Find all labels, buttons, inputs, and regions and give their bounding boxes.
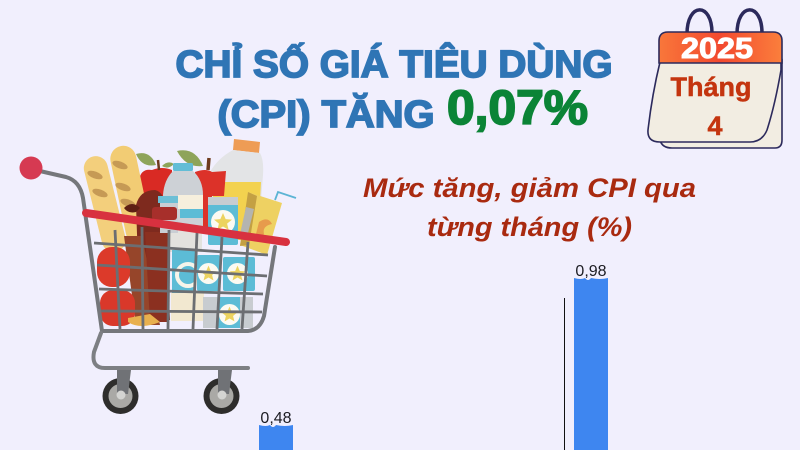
subtitle: Mức tăng, giảm CPI qua [363,173,696,203]
apples [136,150,226,232]
juice jug [210,139,263,240]
cart wire grid [94,227,268,329]
axis line [564,298,566,450]
title: CHỈ SỐ GIÁ TIÊU DÙNG [176,41,612,86]
cart red rail [86,213,286,242]
cans and boxes [197,197,255,328]
icon: calendar: 4 [707,111,723,141]
meats [124,190,178,325]
milk bottle [163,163,204,321]
bar chart [259,263,608,450]
bar: 0,98: 0,98 [575,263,607,280]
subtitle [363,173,696,242]
bar: 0,98 [574,263,608,450]
icon: calendar [648,10,782,148]
bar: 0,48 [259,410,293,450]
back wheel [204,370,240,414]
front wheel [102,370,138,414]
icon: calendar: Tháng [670,72,752,102]
title: (CPI) TĂNG [218,92,434,136]
baguettes [81,143,154,254]
cart frame [31,169,275,368]
icon: shopping cart [20,139,296,414]
title: 0,07% [447,82,588,135]
juice carton [240,192,296,255]
cart handle knob [20,156,42,180]
title [176,41,612,136]
subtitle: từng tháng (%) [427,212,632,242]
tomatoes [97,247,160,326]
bar: 0,48: 0,48 [260,410,292,427]
icon: calendar: 2025 [681,33,753,65]
